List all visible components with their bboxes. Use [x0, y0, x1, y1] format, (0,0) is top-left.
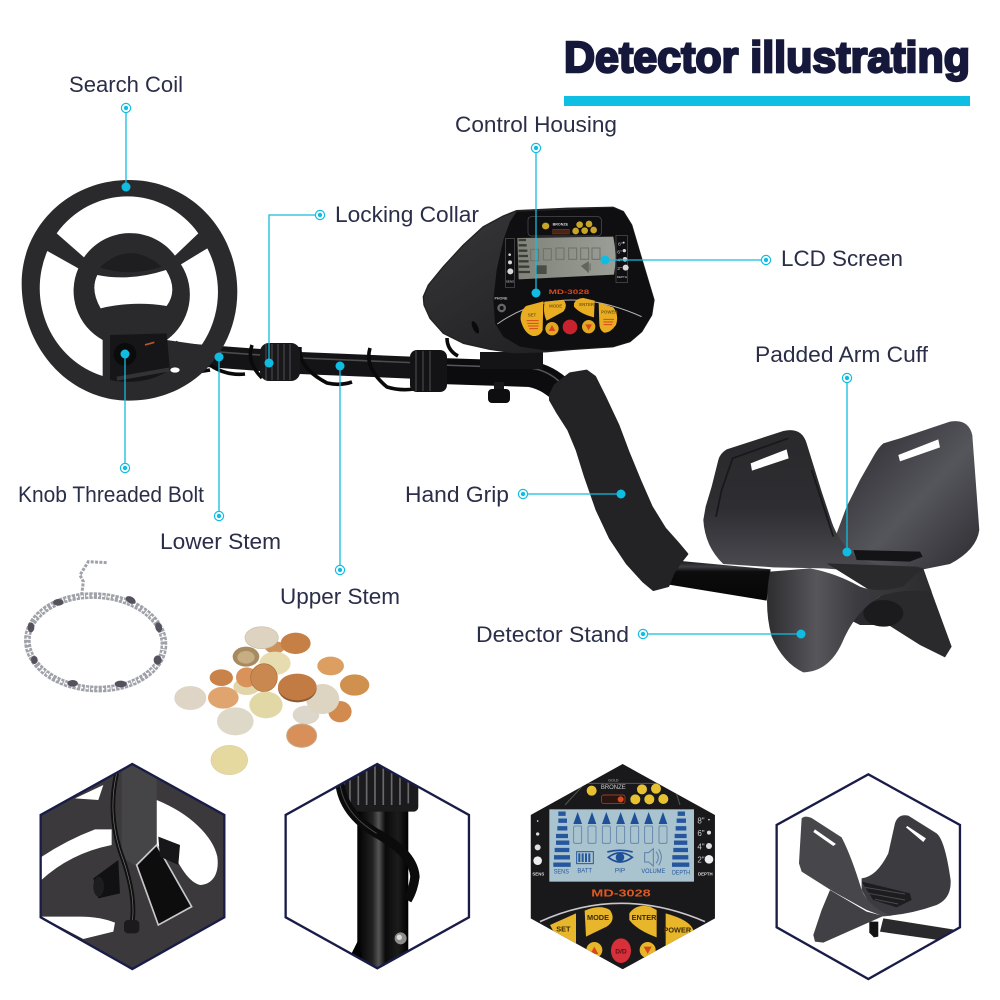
depth panel: 4" — [617, 257, 622, 263]
callout: Locking Collar: Locking Collar — [335, 202, 479, 227]
stem knob — [488, 382, 510, 403]
callout: Knob Threaded Bolt — [18, 350, 204, 507]
stem and handle tube — [166, 338, 568, 403]
sens and depth scales: SENS — [532, 871, 544, 876]
keypad: ENTER — [632, 913, 657, 922]
depth panel: DEPTH — [617, 275, 627, 279]
callout: Control Housing — [455, 112, 617, 298]
callout: Padded Arm Cuff: Padded Arm Cuff — [755, 342, 929, 367]
sens and depth scales: 6" — [697, 829, 705, 838]
callout: LCD Screen — [600, 246, 903, 271]
control buttons: ENTER — [579, 302, 595, 307]
callout: Padded Arm Cuff — [755, 342, 929, 556]
callout: Locking Collar — [264, 202, 479, 368]
arm cuff — [703, 421, 979, 572]
cable loops — [171, 338, 458, 390]
lcd display: BATT — [577, 868, 592, 875]
detector stand — [767, 563, 952, 672]
callout: Hand Grip: Hand Grip — [405, 482, 509, 507]
search coil — [22, 180, 237, 401]
callout: LCD Screen: LCD Screen — [781, 246, 903, 271]
hand grip and arm cuff — [550, 371, 979, 601]
lcd display: PIP — [615, 868, 625, 875]
control buttons — [521, 298, 618, 336]
lcd display: VOLUME — [641, 868, 665, 875]
lcd display: SENS — [554, 869, 569, 876]
keypad: MODE — [587, 913, 609, 922]
rear tube — [657, 559, 771, 601]
model label: MD-3028 — [549, 290, 590, 296]
sens and depth scales: 8" — [697, 816, 705, 825]
top target panel — [528, 217, 601, 236]
bracelet — [25, 562, 166, 692]
thumbnail: arm cuff — [777, 774, 960, 979]
control buttons: MODE — [549, 303, 562, 308]
lcd display — [549, 809, 694, 882]
keypad: POWER — [663, 926, 692, 935]
callout: Search Coil: Search Coil — [69, 72, 183, 97]
keypad — [550, 906, 693, 963]
depth panel: 6" — [617, 249, 622, 255]
control buttons: SET — [528, 313, 537, 318]
sens and depth scales: 4" — [697, 842, 705, 851]
title: Detector illustrating — [564, 33, 970, 82]
locking collar — [260, 343, 300, 381]
lcd screen — [517, 237, 615, 279]
keypad: D/D — [615, 948, 627, 955]
callout: Lower Stem: Lower Stem — [160, 529, 281, 554]
sens panel — [505, 239, 515, 287]
control buttons: POWER — [601, 309, 618, 314]
title — [564, 33, 970, 106]
lcd display: DEPTH — [672, 870, 690, 877]
callout: Knob Threaded Bolt: Knob Threaded Bolt — [18, 482, 204, 507]
target buttons — [565, 778, 680, 805]
phone jack — [494, 297, 508, 312]
coins — [174, 627, 369, 775]
callout: Detector Stand: Detector Stand — [476, 622, 629, 647]
callout: Lower Stem — [160, 352, 281, 554]
model name: MD-3028 — [591, 889, 651, 900]
callout: Search Coil — [69, 72, 183, 192]
hand grip — [550, 371, 687, 590]
sens and depth scales: 2" — [697, 856, 705, 865]
callout: Detector Stand — [476, 622, 806, 647]
top target panel: BRONZE — [553, 222, 569, 226]
stem collar — [410, 350, 447, 392]
depth panel: 8" — [618, 241, 623, 247]
thumbnail: LCD panel — [527, 760, 720, 973]
housing bracket — [480, 352, 543, 369]
control housing — [423, 207, 654, 353]
keypad: SET — [556, 925, 571, 934]
sens and depth scales — [532, 816, 713, 876]
callout: Upper Stem — [280, 362, 400, 609]
target buttons: GOLD — [608, 778, 619, 782]
phone jack: PHONE — [494, 297, 508, 301]
sens panel: SENS — [506, 280, 514, 284]
sens and depth scales: DEPTH — [698, 871, 713, 876]
target buttons: BRONZE — [601, 785, 626, 791]
callout: Control Housing: Control Housing — [455, 112, 617, 137]
thumbnail: stem and cable — [286, 763, 469, 973]
depth panel: 2" — [617, 266, 622, 272]
thumbnail: coil bolt — [41, 763, 224, 969]
depth panel — [616, 235, 629, 283]
callout: Hand Grip — [405, 482, 626, 507]
callout: Upper Stem: Upper Stem — [280, 584, 400, 609]
